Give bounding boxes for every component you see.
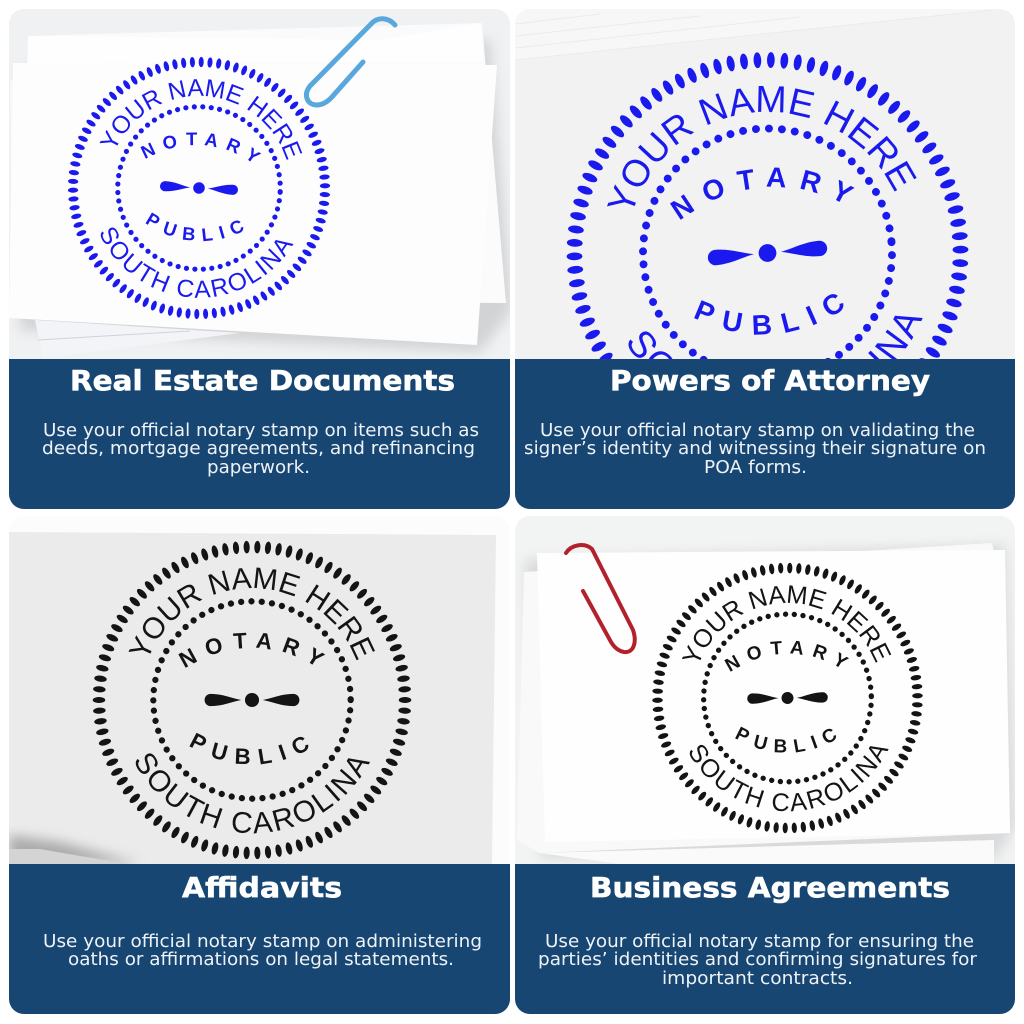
photo: torn grey paper with black stamp — [9, 516, 510, 864]
stamp: black notary seal: YOUR NAME HERE — [682, 585, 892, 663]
stamp: blue notary seal, enlarged and cropped: PUBLIC — [694, 294, 844, 335]
heading: Powers of Attorney — [610, 364, 930, 397]
icon: blue paperclip — [306, 19, 395, 105]
description: deeds, mortgage agreements, and refinancing — [42, 438, 475, 459]
heading: Business Agreements — [590, 871, 950, 904]
stamp: blue notary seal: NOTARY — [140, 132, 262, 162]
description — [43, 931, 482, 970]
stamp: black notary seal — [652, 562, 923, 834]
stamp: black notary seal — [92, 540, 412, 860]
description: POA forms. — [704, 457, 807, 478]
icon: red paperclip — [566, 545, 635, 652]
description: signer’s identity and witnessing their signature on — [524, 438, 986, 459]
stamp: blue notary seal, enlarged and cropped: NOTARY — [670, 168, 854, 220]
photo: paper stack with black stamp — [515, 516, 1016, 864]
panel: business agreements — [515, 516, 1015, 1014]
description: Use your official notary stamp on administering — [43, 931, 482, 952]
description: Use your official notary stamp on items such as — [43, 420, 479, 441]
caption panel: real estate — [9, 359, 510, 509]
stamp: black notary seal: NOTARY — [178, 632, 326, 668]
description — [524, 420, 986, 478]
description: important contracts. — [662, 968, 853, 989]
stamp: black notary seal: YOUR NAME HERE — [128, 568, 375, 660]
stamp: black notary seal: PUBLIC — [190, 732, 308, 764]
stamp: blue notary seal: YOUR NAME HERE — [100, 79, 302, 160]
stamp: blue notary seal, enlarged and cropped — [566, 52, 968, 359]
caption panel: affidavits — [9, 864, 510, 1014]
heading: Real Estate Documents — [70, 364, 455, 397]
description: paperwork. — [207, 457, 310, 478]
stamp: black notary seal: SOUTH CAROLINA — [690, 744, 889, 812]
description — [538, 931, 978, 989]
stamp: blue notary seal, enlarged and cropped: SOUTH CAROLINA — [628, 316, 923, 359]
stamp: blue notary seal, enlarged and cropped: YOUR NAME HERE — [607, 86, 917, 206]
description: oaths or affirmations on legal statements. — [68, 949, 454, 970]
stamp: black notary seal: NOTARY — [724, 640, 849, 672]
stamp: black notary seal: SOUTH CAROLINA — [136, 753, 370, 834]
caption panel: business agreements — [515, 864, 1015, 1014]
stamp: black notary seal: PUBLIC — [735, 726, 836, 752]
description — [42, 420, 479, 478]
caption panel: powers of attorney — [515, 359, 1015, 509]
panel: affidavits — [9, 532, 510, 1014]
photo: paper stack with blue stamp — [9, 9, 512, 359]
description: Use your official notary stamp for ensuring the — [545, 931, 974, 952]
stamp: blue notary seal: PUBLIC — [146, 212, 244, 242]
stamp: blue notary seal — [68, 56, 330, 320]
stamp: blue notary seal: SOUTH CAROLINA — [100, 228, 294, 298]
heading: Affidavits — [182, 871, 342, 904]
photo: paper close-up with blue stamp — [515, 9, 1015, 359]
panel: real estate documents — [9, 9, 510, 509]
description: parties’ identities and confirming signatures for — [538, 949, 978, 970]
panel: powers of attorney — [515, 9, 1015, 509]
description: Use your official notary stamp on validating the — [540, 420, 975, 441]
